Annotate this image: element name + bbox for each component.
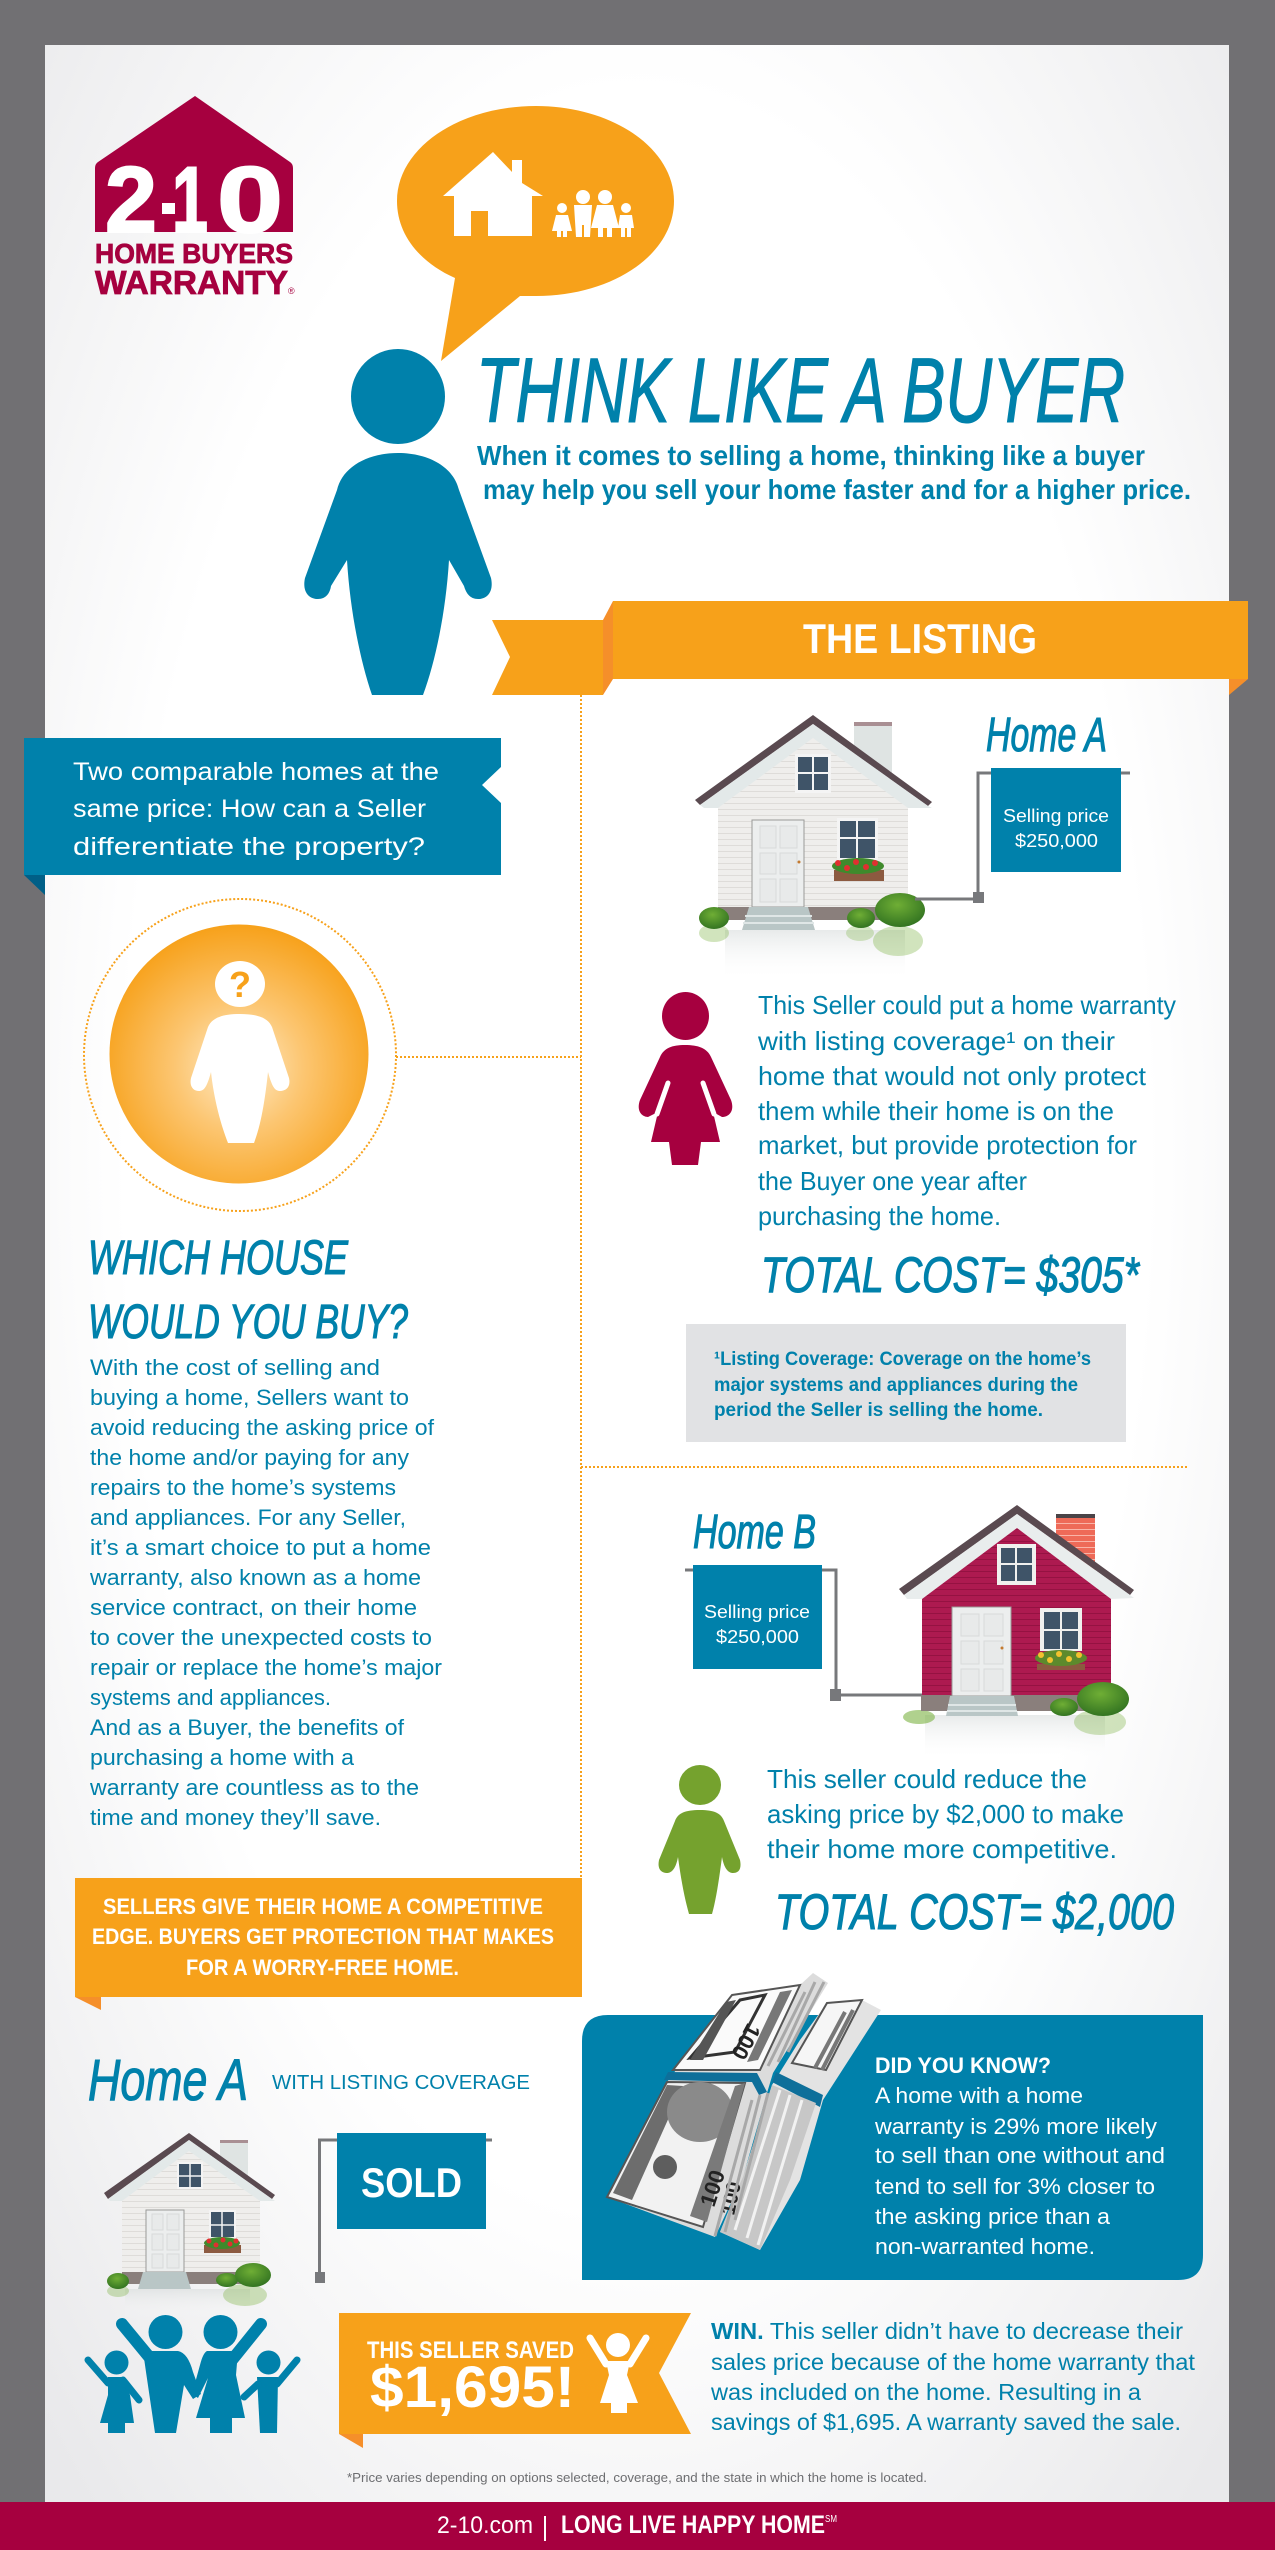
heading: which house would you buy: WOULD YOU BUY? [88, 1296, 408, 1349]
callout: two comparable homes [24, 738, 501, 895]
text: win: sales price because of the home warranty that [711, 2349, 1196, 2375]
body text: which house: warranty are countless as to the [89, 1775, 419, 1800]
panel: did you know: the asking price than a [875, 2204, 1111, 2229]
icon: stacks of hundred dollar bills [607, 1973, 881, 2250]
boy [257, 2377, 278, 2433]
banner: the listing [492, 601, 1248, 695]
body text: which house: buying a home, Sellers want to [90, 1385, 409, 1410]
logo: 2-10 Home Buyers Warranty: HOME BUYERS [95, 238, 293, 269]
text: win: WIN. This seller didn’t have to decrease their [711, 2318, 1183, 2344]
footnote box: listing coverage: period the Seller is selling the home. [714, 1400, 1043, 1421]
text: Home A seller option: This Seller could put a home warranty [758, 990, 1176, 1020]
icon: white cheering figure [590, 2333, 646, 2413]
icon: green seller man [659, 1765, 741, 1914]
footnote box: listing coverage [686, 1324, 1126, 1442]
icon: orange circle with questioning person: ? [229, 964, 251, 1005]
body text: which house: avoid reducing the asking price of [90, 1415, 435, 1440]
logo: 2-10 Home Buyers Warranty [95, 96, 295, 301]
icon: house B, red [899, 1505, 1134, 1760]
sign: Home A price [915, 768, 1130, 903]
label: Home A with listing coverage: Home A [88, 2048, 248, 2113]
body text: which house: service contract, on their home [90, 1595, 417, 1620]
icon: house [443, 152, 543, 236]
icon: orange circle with questioning person [110, 924, 368, 1184]
body text: which house: With the cost of selling and [90, 1355, 380, 1380]
text: Home A seller option: home that would not only protect [758, 1061, 1147, 1091]
orange callout: competitive edge: EDGE. BUYERS GET PROTECTION THAT MAKES [92, 1924, 554, 1949]
footer bar: LONG LIVE HAPPY HOME [561, 2511, 825, 2539]
text: win: savings of $1,695. A warranty saved the sale. [711, 2409, 1181, 2435]
girl [100, 2377, 134, 2433]
icon: stacks of hundred dollar bills: 100 [726, 2020, 766, 2064]
text: Home B seller option [767, 1764, 1124, 1864]
subtitle: When it comes to selling a home, thinking like a buyer [477, 440, 1145, 471]
icon: small white house [104, 2133, 275, 2319]
text: Home B seller option: asking price by $2,000 to make [767, 1799, 1124, 1829]
sign: Home A price: $250,000 [1015, 831, 1098, 851]
body text: which house: the home and/or paying for any [90, 1445, 409, 1470]
body text: which house: purchasing a home with a [90, 1745, 355, 1770]
dotted connectors [84, 695, 1187, 1878]
callout: two comparable homes: same price: How can a Seller [73, 795, 426, 823]
back stack [720, 2000, 881, 2250]
panel: did you know: A home with a home [875, 2083, 1083, 2108]
orange callout: competitive edge [75, 1878, 582, 2010]
panel: did you know: to sell than one without and [875, 2143, 1165, 2168]
icon: house A, white [695, 715, 932, 980]
banner: the listing: THE LISTING [803, 615, 1037, 662]
text: Home B seller option: their home more competitive. [767, 1834, 1117, 1864]
ribbon: this seller saved [339, 2313, 691, 2448]
heading: which house would you buy [88, 1232, 408, 1349]
logo: 2-10 Home Buyers Warranty: 0 [217, 147, 283, 252]
text: Home A seller option: purchasing the home. [758, 1201, 1001, 1231]
mother [192, 2351, 245, 2433]
bill number text: 100 [695, 2167, 730, 2210]
orange callout: competitive edge: FOR A WORRY-FREE HOME. [186, 1955, 459, 1980]
text: Home A seller option [757, 990, 1176, 1231]
label: Home A with listing coverage: WITH LISTING COVERAGE [272, 2072, 530, 2094]
icon: stacks of hundred dollar bills: 100 [717, 2180, 746, 2217]
speech bubble with house and family icons [397, 106, 674, 361]
callout: two comparable homes: Two comparable homes at the [73, 758, 439, 786]
sign: Home B price [685, 1565, 922, 1701]
logo: 2-10 Home Buyers Warranty: 1 [172, 147, 208, 252]
body text: which house: And as a Buyer, the benefits of [90, 1715, 405, 1740]
text: Home A seller option: the Buyer one year after [758, 1166, 1027, 1196]
text: Home A seller option: with listing coverage¹ on their [757, 1026, 1115, 1056]
body text: which house: time and money they’ll save. [90, 1805, 381, 1830]
subtitle: may help you sell your home faster and for a higher price. [483, 474, 1191, 505]
panel: did you know: DID YOU KNOW? [875, 2053, 1051, 2078]
text: Home A seller option: them while their home is on the [758, 1096, 1114, 1126]
icon: blue person [304, 349, 492, 695]
text: win: was included on the home. Resulting in a [710, 2379, 1141, 2405]
panel: did you know: non-warranted home. [875, 2234, 1095, 2259]
sign: Home A price: Selling price [1003, 806, 1109, 826]
body text: which house [89, 1355, 442, 1830]
footer bar: SM [825, 2514, 837, 2525]
footer bar [0, 2502, 1275, 2550]
logo: 2-10 Home Buyers Warranty: ® [288, 286, 295, 296]
sign: sold: SOLD [361, 2159, 462, 2206]
subtitle [477, 440, 1191, 505]
heading: which house would you buy: WHICH HOUSE [88, 1232, 349, 1285]
orange callout: competitive edge: SELLERS GIVE THEIR HOME A COMPETITIVE [103, 1894, 543, 1919]
icon: family [552, 190, 634, 237]
ribbon: this seller saved: $1,695! [370, 2355, 575, 2420]
text: Home A seller option: market, but provide protection for [758, 1130, 1137, 1160]
label: Home A: Home A [986, 709, 1107, 762]
total cost: Home A: TOTAL COST= $305* [761, 1247, 1140, 1303]
ribbon: this seller saved: THIS SELLER SAVED [367, 2337, 574, 2364]
footnote box: listing coverage: major systems and appliances during the [714, 1375, 1078, 1396]
body text: which house: repair or replace the home’s major [90, 1655, 442, 1680]
body text: which house: systems and appliances. [90, 1685, 331, 1710]
footer bar: 2-10.com [437, 2512, 533, 2539]
sign: Home B price: $250,000 [716, 1627, 799, 1647]
icon: maroon seller woman [639, 992, 732, 1165]
footnote box: listing coverage: ¹Listing Coverage: Coverage on the home’s [714, 1349, 1091, 1370]
total cost: Home B: TOTAL COST= $2,000 [775, 1884, 1174, 1940]
label: Home A with listing coverage [88, 2048, 530, 2113]
panel: did you know: tend to sell for 3% closer to [875, 2174, 1155, 2199]
sign: sold [315, 2133, 492, 2283]
panel: did you know: warranty is 29% more likely [874, 2114, 1157, 2139]
front stack [607, 1973, 828, 2237]
father [143, 2351, 201, 2433]
body text: which house: it’s a smart choice to put a home [90, 1535, 431, 1560]
body text: which house: to cover the unexpected costs to [90, 1625, 432, 1650]
body text: which house: repairs to the home’s systems [90, 1475, 396, 1500]
text: Home B seller option: This seller could reduce the [767, 1764, 1087, 1794]
icon: celebrating family [88, 2315, 297, 2433]
body text: which house: warranty, also known as a home [89, 1565, 421, 1590]
panel: did you know [582, 2015, 1203, 2280]
label: Home B: Home B [693, 1506, 816, 1559]
callout: two comparable homes: differentiate the property? [73, 833, 425, 861]
fine print: *Price varies depending on options selected, coverage, and the state in which the home is located. [347, 2470, 927, 2485]
logo: 2-10 Home Buyers Warranty: 2 [105, 147, 157, 252]
text: win [710, 2318, 1196, 2435]
logo: 2-10 Home Buyers Warranty: WARRANTY [95, 264, 288, 301]
sign: Home B price: Selling price [704, 1602, 810, 1622]
body text: which house: and appliances. For any Seller, [90, 1505, 406, 1530]
